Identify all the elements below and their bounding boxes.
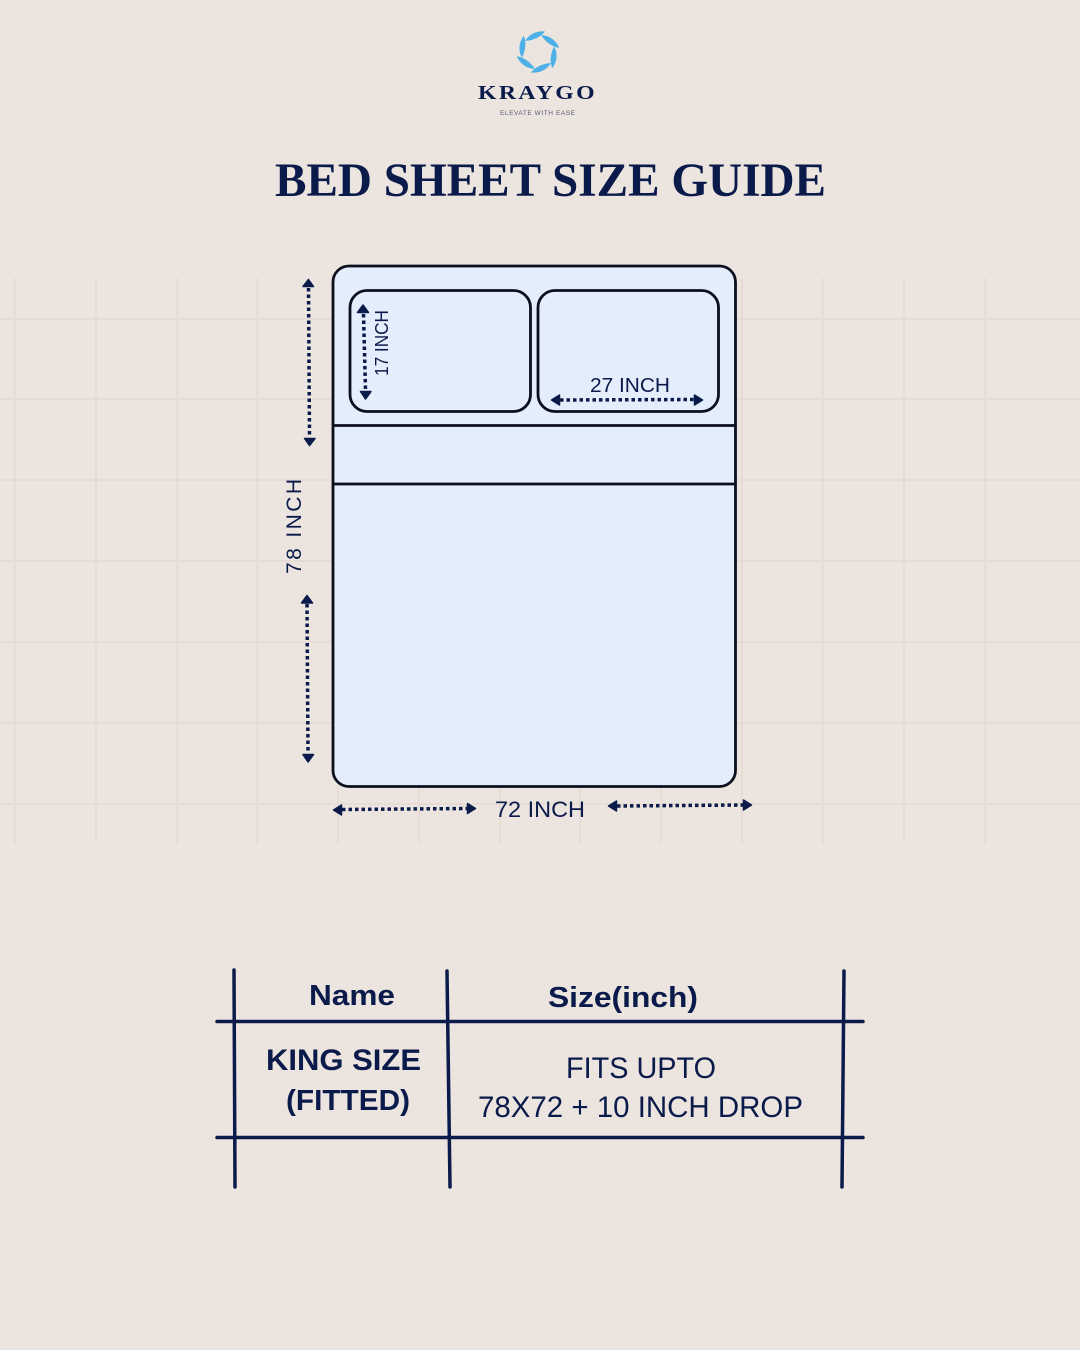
icon: blue leaf ring — [514, 30, 562, 74]
arrow: left pillow height — [358, 305, 371, 399]
label: 72 inch: 72 INCH — [495, 797, 585, 822]
panel: fold band — [333, 426, 735, 484]
header: name: Name — [309, 980, 395, 1012]
label: 17 inch: 17 INCH — [372, 310, 392, 376]
logo tagline: ELEVATE WITH EASE — [500, 110, 576, 117]
title: BED SHEET SIZE GUIDE — [275, 154, 826, 207]
cell: fitted: (FITTED) — [286, 1085, 410, 1117]
diagram: bed sheet — [283, 266, 752, 822]
arrow: width left — [334, 804, 476, 815]
label: 27 inch: 27 INCH — [590, 375, 670, 397]
logo: Kraygo — [478, 30, 597, 117]
header: size: Size(inch) — [548, 982, 698, 1014]
cell: king size: KING SIZE — [266, 1044, 421, 1077]
table: size chart — [217, 970, 863, 1187]
logo wordmark: KRAYGO — [478, 82, 597, 104]
panel: right pillow — [538, 290, 718, 412]
panel: left pillow — [350, 290, 530, 412]
arrow: height upper — [303, 280, 315, 446]
arrow: right pillow width — [552, 395, 702, 405]
cell: dimensions: 78X72 + 10 INCH DROP — [478, 1091, 803, 1124]
arrow: height lower — [302, 596, 314, 762]
table grid lines — [217, 970, 863, 1187]
panel: mattress — [333, 266, 736, 786]
arrow: width right — [608, 800, 752, 811]
label: 78 inch: 78 INCH — [283, 479, 306, 574]
cell: fits upto: FITS UPTO — [566, 1052, 716, 1085]
